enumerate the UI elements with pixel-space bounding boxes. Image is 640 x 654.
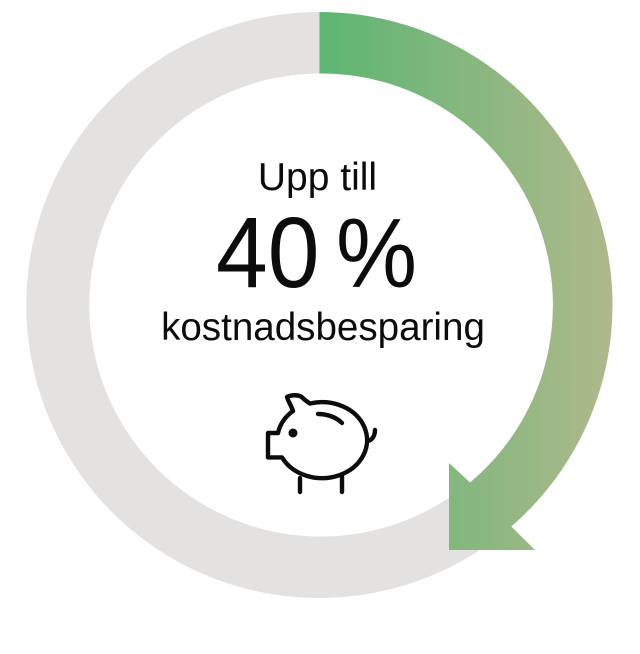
text: 40%: 40 <box>216 198 319 309</box>
text: kostnadsbesparing: kostnadsbesparing <box>161 306 485 349</box>
green progress arrow <box>320 12 613 550</box>
grey track ring <box>26 12 480 598</box>
text: 40%: % <box>336 199 417 309</box>
text: 40% <box>216 198 417 309</box>
text: upp till: Upp till <box>258 156 377 199</box>
icon: piggy bank <box>268 395 375 492</box>
